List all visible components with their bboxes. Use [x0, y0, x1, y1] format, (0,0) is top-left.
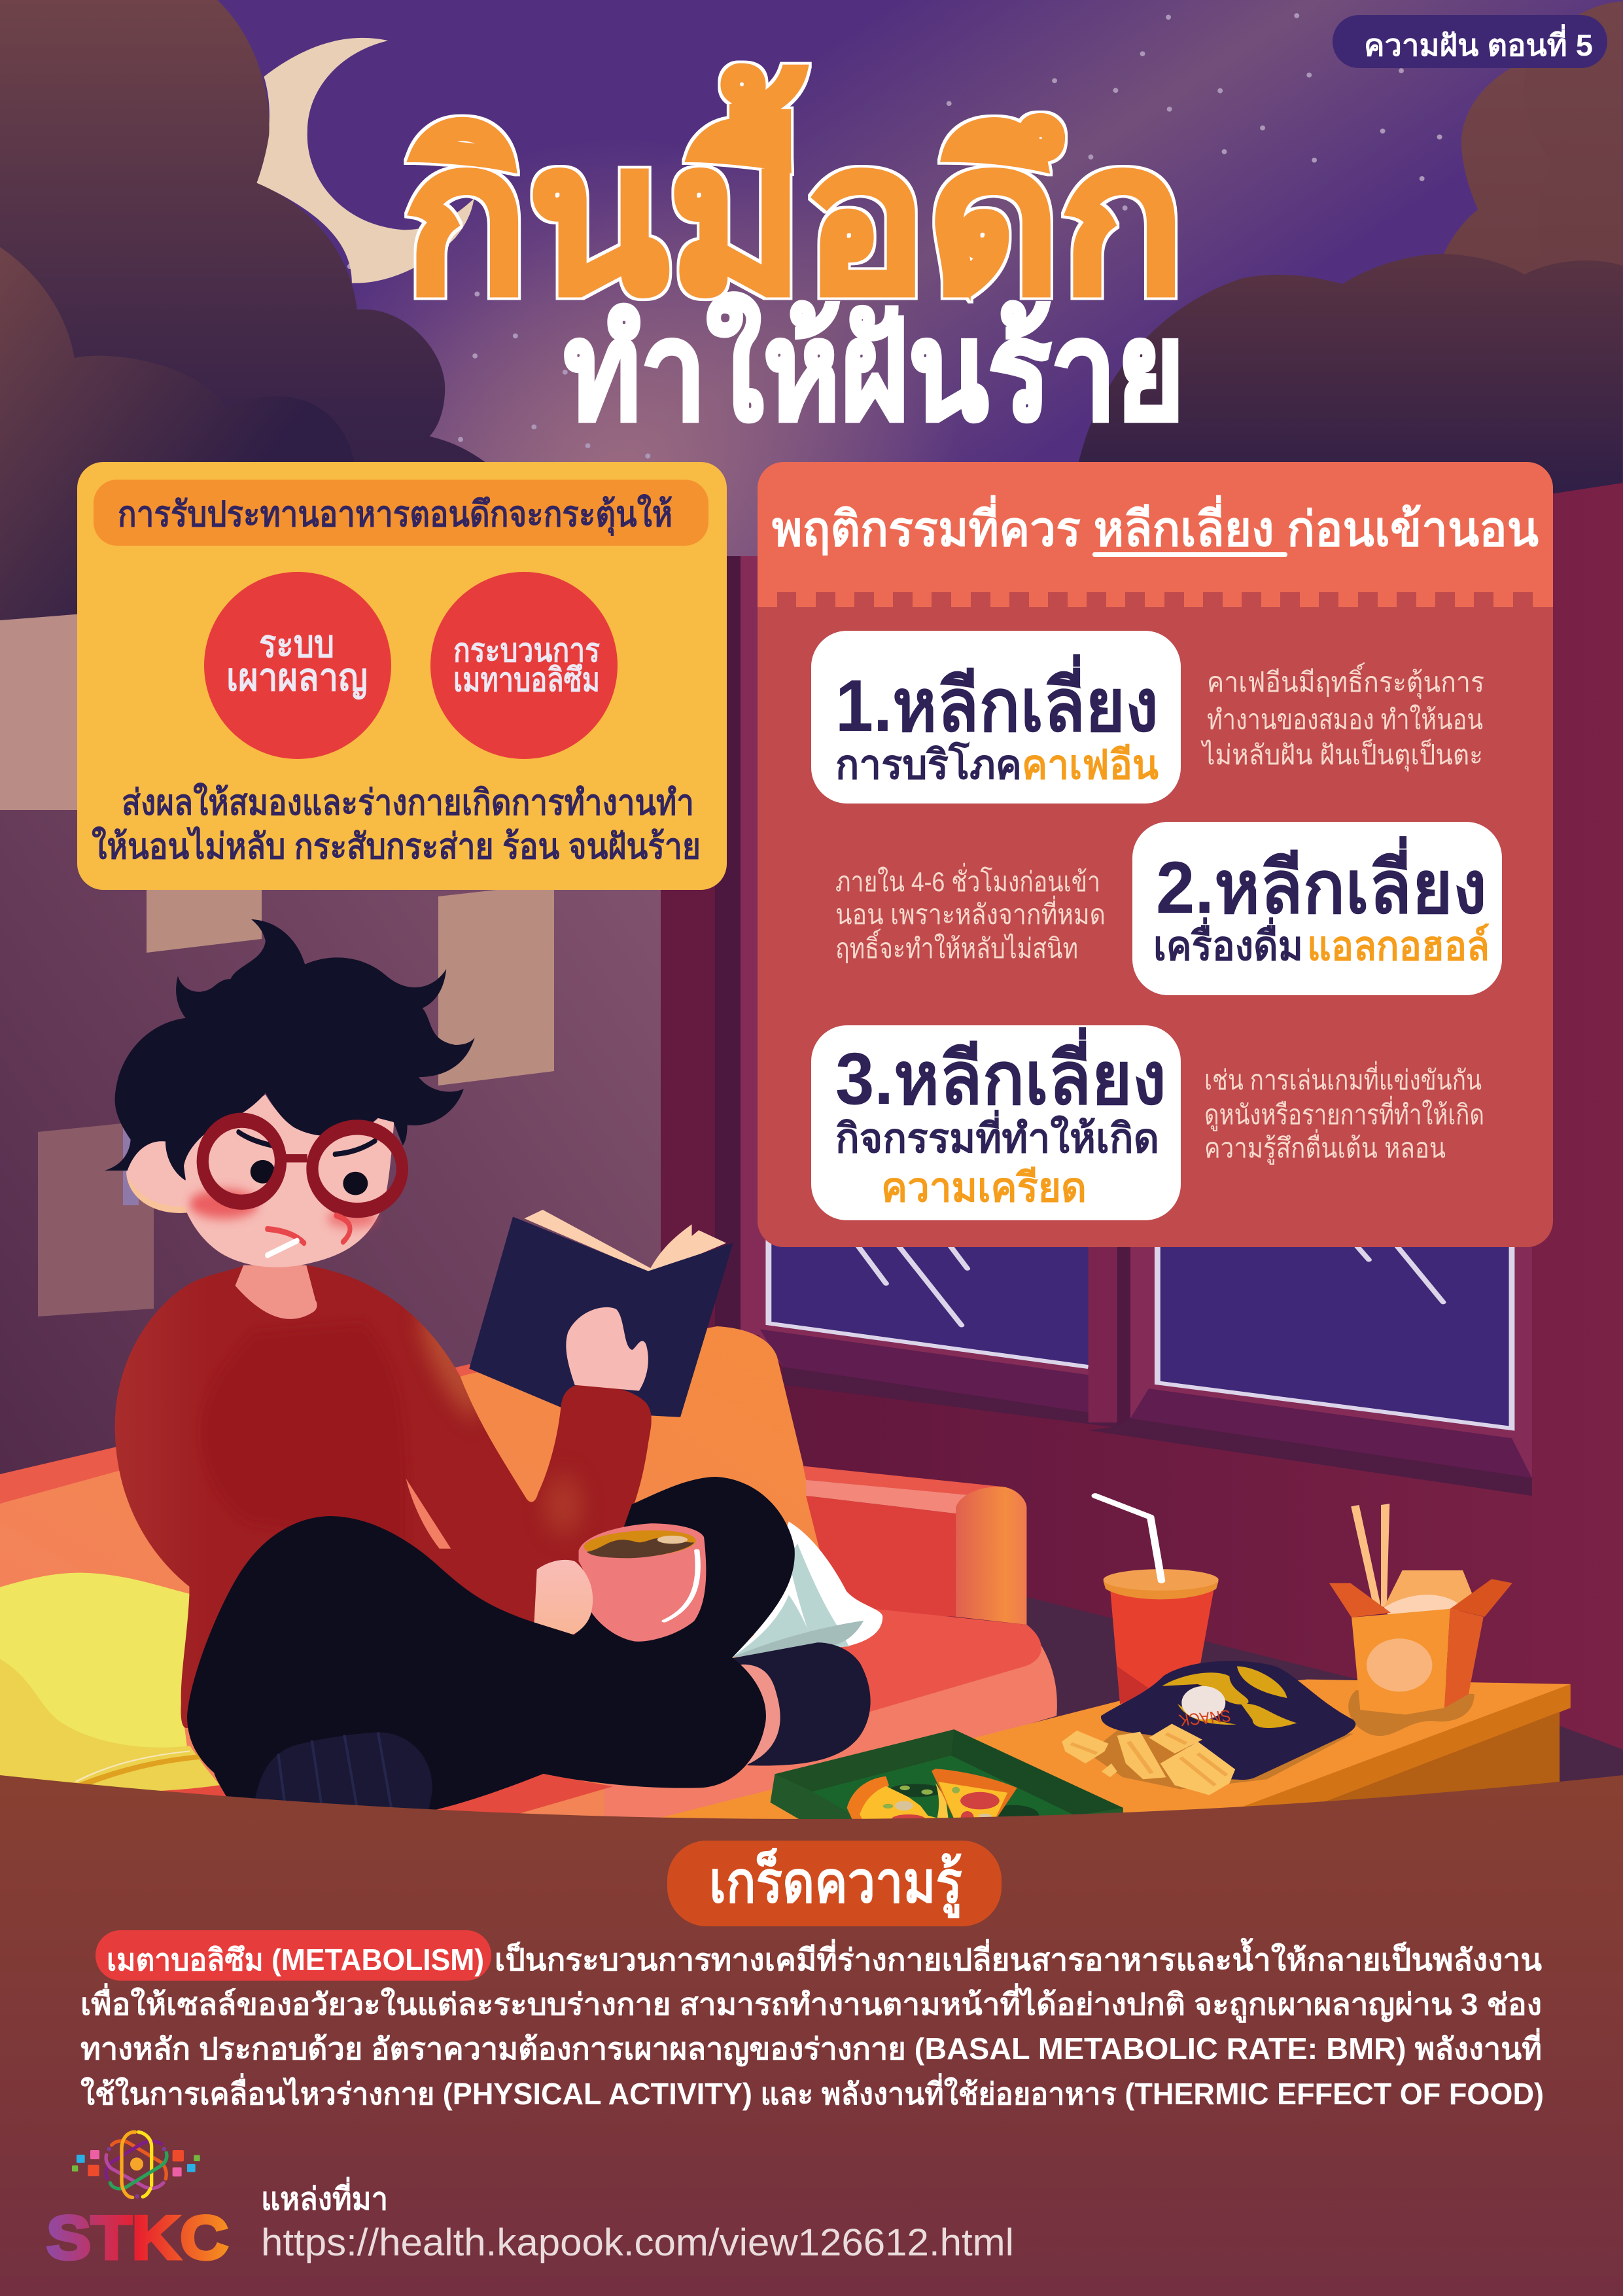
logo: STKC	[46, 2132, 228, 2272]
sofa gap	[406, 1479, 451, 1549]
stress description: ความรู้สึกตื่นเต้น หลอน	[1204, 1129, 1446, 1165]
caffeine description: คาเฟอีนมีฤทธิ์กระตุ้นการ	[1207, 662, 1484, 699]
card 1 caffeine: 1.หลีกเลี่ยง	[835, 654, 1159, 747]
card 1 caffeine: คาเฟอีน	[1022, 743, 1159, 788]
panel conclusion text: ส่งผลให้สมองและร่างกายเกิดการทำงานทำ	[122, 782, 694, 822]
pillow and far leg	[720, 1521, 882, 1765]
soft drink cup	[1095, 1496, 1219, 1704]
bottom brown section background	[0, 1775, 1623, 2296]
circle: burning system	[204, 572, 391, 759]
mouth and cheek line	[268, 1216, 350, 1255]
panel header	[758, 462, 1553, 607]
hand on book	[566, 1307, 648, 1391]
knowledge text block: เป็นกระบวนการทางเคมีที่ร่างกายเปลี่ยนสารอาหารและน้ำให้กลายเป็นพลังงาน	[495, 1937, 1543, 1977]
knowledge text block: เพื่อให้เซลล์ของอวัยวะในแต่ละระบบร่างกาย สามารถทำงานตามหน้าที่ได้อย่างปกติ จะถูกเผาผลาญผ่าน 3 ช่อง	[80, 1983, 1542, 2023]
card 2 alcohol	[1132, 822, 1502, 995]
stress description	[1204, 1061, 1484, 1165]
card 2 alcohol: 2.หลีกเลี่ยง	[1156, 836, 1487, 928]
source credit: https://health.kapook.com/view126612.html	[261, 2221, 1014, 2264]
knowledge text block: ใช้ในการเคลื่อนไหวร่างกาย (PHYSICAL ACTIVITY) และ พลังงานที่ใช้ย่อยอาหาร (THERMIC EFFECT OF FOOD)	[80, 2073, 1544, 2111]
alcohol description: นอน เพราะหลังจากที่หมด	[835, 896, 1106, 930]
clouds: right	[1072, 1, 1623, 501]
ankle	[727, 1665, 780, 1765]
coffee cup	[579, 1523, 706, 1642]
legs, foot, hand and coffee cup	[187, 1477, 795, 1811]
floor	[720, 1597, 1623, 1825]
night sky background	[0, 0, 1623, 654]
panel conclusion text	[92, 782, 701, 866]
main title: กินมื้อดึก	[404, 65, 1185, 336]
knowledge section heading: เกร็ดความรู้	[709, 1847, 962, 1918]
neck	[236, 1265, 317, 1319]
source credit: แหล่งที่มา	[261, 2176, 388, 2217]
yellow cushion and sofa seat details	[0, 1573, 613, 1816]
circle: metabolism	[430, 572, 618, 759]
snack bag and chips	[1062, 1661, 1355, 1795]
sweater	[107, 1254, 667, 1744]
knowledge text block	[80, 1930, 1544, 2111]
sofa	[0, 1326, 850, 1832]
card 2 alcohol: แอลกอฮอล์	[1307, 923, 1490, 969]
panel heading bar: การรับประทานอาหารตอนดึกจะกระตุ้นให้	[118, 493, 672, 537]
table	[659, 1680, 1571, 1825]
wall posters	[38, 867, 554, 1316]
logo wordmark: STKC	[46, 2203, 228, 2272]
sofa right arm and seat	[604, 1466, 1057, 1825]
foot	[255, 1732, 432, 1811]
episode badge	[1333, 15, 1607, 68]
knowledge text block: ทางหลัก ประกอบด้วย อัตราความต้องการเผาผลาญของร่างกาย (BASAL METABOLIC RATE: BMR) พลังงานที่	[80, 2028, 1542, 2066]
panel heading bar	[94, 480, 708, 546]
stars	[347, 13, 1512, 459]
pizza slices	[847, 1769, 1017, 1824]
sofa back, left side	[0, 1364, 523, 1504]
knowledge section heading	[667, 1841, 1002, 1926]
caffeine description: ทำงานของสมอง ทำให้นอน	[1207, 704, 1483, 735]
panel conclusion text: ให้นอนไม่หลับ กระสับกระส่าย ร้อน จนฝันร้าย	[92, 826, 701, 866]
hair	[105, 919, 475, 1180]
character: reading person	[105, 919, 733, 1744]
circle: burning system: เผาผลาญ	[226, 656, 368, 699]
panel: behaviours to avoid	[758, 462, 1553, 1247]
glasses	[203, 1120, 402, 1210]
snack bag and chips: SNACK	[1178, 1706, 1232, 1730]
stress description: เช่น การเล่นเกมที่แข่งขันกัน	[1204, 1061, 1482, 1095]
book	[469, 1210, 733, 1417]
eyes and brows	[238, 1132, 375, 1195]
panel header: พฤติกรรมที่ควร หลีกเลี่ยง ก่อนเข้านอน	[772, 495, 1539, 556]
logo icon	[72, 2132, 200, 2199]
alcohol description	[835, 863, 1106, 964]
caffeine description: ไม่หลับฝัน ฝันเป็นตุเป็นตะ	[1200, 739, 1483, 772]
room walls	[0, 483, 1623, 1780]
card 1 caffeine: การบริโภค	[835, 741, 1022, 788]
episode badge: ความฝัน ตอนที่ 5	[1364, 24, 1593, 62]
card 2 alcohol: เครื่องดื่ม	[1153, 917, 1303, 969]
panel: late night eating effects	[77, 462, 727, 890]
hand on cup	[534, 1560, 593, 1634]
circle: burning system: ระบบ	[259, 623, 334, 665]
legs	[187, 1477, 795, 1811]
clouds: left	[0, 0, 786, 641]
alcohol description: ภายใน 4-6 ชั่วโมงก่อนเข้า	[835, 863, 1100, 897]
stress description: ดูหนังหรือรายการที่ทำให้เกิด	[1204, 1096, 1484, 1131]
takeaway noodle box	[1329, 1504, 1512, 1736]
main title	[404, 65, 1185, 448]
window right	[1089, 1190, 1532, 1496]
circle: metabolism: เมทาบอลิซึม	[453, 662, 600, 698]
crescent moon	[256, 38, 474, 283]
caffeine description	[1200, 662, 1484, 772]
highlight pill	[96, 1930, 491, 1981]
knowledge text block: เมตาบอลิซึม (METABOLISM)	[107, 1943, 484, 1977]
card 1 caffeine	[811, 631, 1181, 804]
circle: metabolism: กระบวนการ	[453, 632, 600, 669]
source credit	[261, 2176, 1014, 2264]
card 3 stress: ความเครียด	[881, 1165, 1087, 1210]
pizza box	[771, 1729, 1123, 1826]
card 3 stress: 3.หลีกเลี่ยง	[835, 1027, 1166, 1120]
face	[126, 1095, 394, 1267]
window left	[754, 1190, 1123, 1428]
main title: ทำให้ฝันร้าย	[564, 292, 1185, 448]
card 3 stress	[811, 1025, 1181, 1220]
alcohol description: ฤทธิ์จะทำให้หลับไม่สนิท	[835, 928, 1078, 964]
windows and floor	[720, 1190, 1623, 1825]
card 3 stress: กิจกรรมที่ทำให้เกิด	[835, 1110, 1159, 1161]
